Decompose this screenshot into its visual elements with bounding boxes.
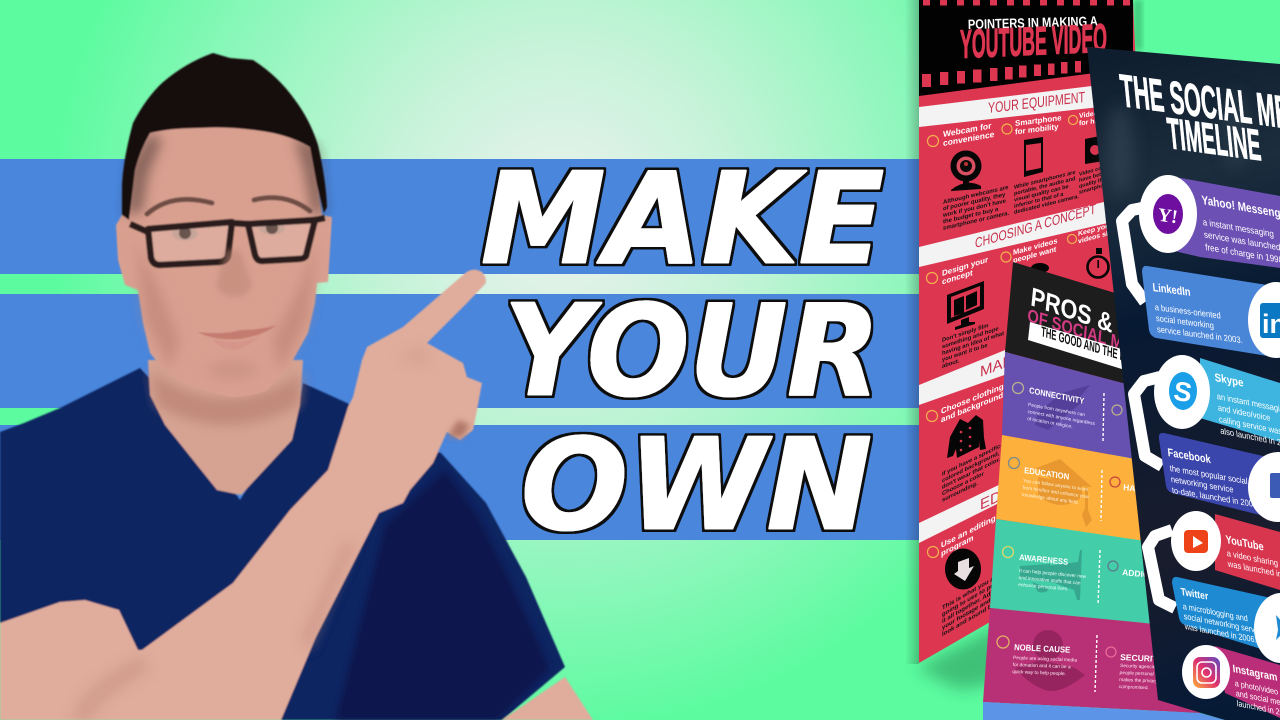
item: youtube: [1171, 511, 1280, 590]
film strip squares: [922, 0, 1130, 87]
row: awareness: enhance personal lives.: [1018, 582, 1069, 593]
item: twitter: Twitter: [1180, 586, 1209, 603]
face shading: [135, 240, 318, 379]
shirt shadow: [335, 470, 550, 720]
band: magenta: [983, 608, 1200, 713]
icon: camera: [1085, 134, 1110, 164]
row: noble cause: SECURITY: [1120, 652, 1164, 664]
nose: [216, 250, 252, 297]
item: design your concept: concept: [942, 268, 973, 286]
item: use an editing program: your footage and the: [942, 591, 1002, 632]
neck: [148, 360, 303, 495]
item: video camera: quality than: [1079, 175, 1110, 190]
item: design your concept: [926, 255, 1004, 370]
poster shadow: [905, 0, 1280, 720]
item: webcam: convenience: [943, 129, 995, 148]
item: keep videos short: Keep your: [1078, 221, 1112, 238]
section band: edit: [919, 482, 1014, 543]
poster dark header: [1005, 262, 1130, 385]
section band: make: [919, 348, 1022, 405]
item: yahoo messenger: [1139, 175, 1280, 268]
icon: bow: [1031, 263, 1049, 273]
item: use an editing program: program: [941, 532, 974, 558]
row: connectivity: CONNECTIVITY: [1029, 385, 1085, 406]
eyes: [172, 222, 285, 240]
band: blue footer: [983, 702, 1225, 720]
icon: smartphone: [1024, 137, 1043, 177]
title: make your own: YOUR: [504, 278, 880, 424]
row: education: knowledge about any field.: [1022, 492, 1079, 506]
icon: instagram: [1193, 657, 1220, 688]
row: connectivity: of location or religion.: [1027, 416, 1073, 430]
title: make your own: OWN: [521, 412, 872, 558]
item: choose clothing: If you have a specific-: [942, 442, 1002, 478]
band: orange: [996, 435, 1145, 541]
item: smartphone: While smartphones are: [1014, 170, 1075, 191]
item: keep videos short: [1068, 219, 1120, 278]
row: noble cause: makes the privacy: [1119, 677, 1159, 685]
item: video camera: for high quality: [1079, 113, 1130, 127]
panel: pros and cons of social media poster: [983, 262, 1225, 720]
icon: megaphone: [1020, 550, 1082, 600]
row: noble cause: quick way to help people.: [1012, 669, 1066, 677]
item: skype: [1154, 355, 1280, 451]
row: awareness: and innovative stuffs that can: [1018, 575, 1081, 587]
band: purple: [1002, 352, 1135, 459]
item: use an editing program: Use an editing: [941, 513, 996, 550]
item: smartphone: dedicated video camera.: [1014, 194, 1079, 216]
item: webcam: Although webcams are: [943, 185, 1009, 206]
row: education: You can follow anyone to learn: [1023, 478, 1089, 493]
item: choose clothing: colored background,: [942, 450, 1000, 484]
item: webcam: work if you don't have: [942, 198, 1007, 219]
item: instagram: Instagram: [1232, 663, 1278, 684]
item: smartphone: for mobility: [1015, 122, 1059, 136]
item: choose clothing: Choose clothing: [941, 381, 1004, 416]
row: awareness: It can help people discover new: [1019, 568, 1087, 580]
icon: download: [945, 548, 981, 590]
connector: skype to facebook: [1134, 377, 1162, 466]
item: skype: Skype: [1214, 371, 1244, 390]
item: choose clothing: surrounding.: [942, 480, 978, 504]
item: twitter: was launched in 2006.: [1183, 621, 1257, 645]
blue stripes: [0, 159, 920, 540]
poster title: [960, 14, 1107, 67]
icon: youtube play: [1184, 530, 1208, 553]
item: design your concept: Design your: [942, 255, 989, 278]
row: noble cause: Security agencies can: [1120, 663, 1167, 671]
item: smartphone: portable, the audio and: [1014, 176, 1076, 197]
item: design your concept: something and hope: [942, 326, 999, 350]
item: use an editing program: [928, 513, 1006, 638]
poster title: PROS & CONS: [1029, 282, 1182, 362]
poster title: THE GOOD AND THE BAD: [1041, 324, 1137, 368]
item: twitter: social networking service: [1183, 611, 1265, 637]
row: noble cause: compromised.: [1118, 684, 1149, 691]
item: choose clothing: and background: [941, 390, 1003, 424]
row: awareness: ADDICTION: [1122, 567, 1170, 582]
row: noble cause: for donation and it can be a: [1012, 662, 1071, 670]
item: keep videos short: videos short: [1078, 226, 1120, 245]
item: smartphone: [1002, 113, 1079, 216]
item: webcam: of poorer quality, they: [943, 192, 1006, 212]
icon: monitor: [947, 281, 984, 330]
row: education: from him/her and enhance your: [1022, 485, 1090, 500]
panel: YouTube video poster: [919, 0, 1150, 663]
item: smartphone: inferior to that of a: [1014, 191, 1064, 210]
face: [116, 100, 332, 397]
item: facebook: Facebook: [1167, 446, 1211, 467]
icon: twitter: [1276, 615, 1280, 640]
icon: skype: [1169, 372, 1197, 410]
title: make your own: [481, 146, 884, 558]
icon: globe and hands: [1015, 630, 1085, 691]
item: youtube: YouTube: [1225, 533, 1264, 554]
section band: make: MAKE: [980, 348, 1022, 381]
item: facebook: networking service: [1170, 475, 1234, 495]
item: make videos people want: people want: [1013, 244, 1057, 265]
icon: yahoo: Y!: [1156, 205, 1179, 228]
item: smartphone: visual quality can be: [1014, 184, 1069, 204]
neck shadow: [150, 370, 302, 425]
item: linkedin: service launched in 2003.: [1156, 325, 1243, 345]
item: choose clothing: [926, 381, 1004, 504]
item: design your concept: Don't simply film: [942, 323, 988, 344]
section band: your equipment: YOUR EQUIPMENT: [988, 89, 1085, 117]
icon: graduation cap: [1036, 459, 1092, 527]
row: noble cause: people personal data: [1119, 670, 1165, 678]
row: connectivity: connect with anyone regardless: [1027, 409, 1096, 427]
item: use an editing program: This is what you are: [942, 572, 1000, 612]
row: awareness: [1002, 546, 1170, 605]
row: education: [1008, 458, 1149, 527]
item: yahoo messenger: service was launched: [1203, 229, 1280, 253]
icon: stopwatch: [1088, 248, 1108, 278]
title: make your own: MAKE: [481, 146, 884, 292]
item: use an editing program: it all together. Adjust: [942, 584, 1002, 625]
thumb shadow: [448, 420, 470, 438]
item: skype: and video/voice: [1217, 402, 1271, 423]
item: use an editing program: look and sound better.: [942, 595, 1006, 638]
item: linkedin: a business-oriented: [1154, 303, 1222, 321]
icon: facebook: [1270, 473, 1280, 498]
row: education: HARM: [1123, 482, 1149, 495]
mouth: [197, 325, 277, 350]
icon: skype: S: [1172, 376, 1194, 408]
row: education: EDUCATION: [1024, 465, 1070, 482]
icon: jacket: [947, 415, 986, 458]
poster black header: [919, 0, 1133, 96]
item: webcam: [928, 120, 1009, 232]
item: linkedin: social networking: [1155, 314, 1215, 331]
item: video camera: smartphones: [1079, 180, 1113, 196]
item: webcam: the budget to buy a: [943, 207, 999, 225]
icon: yahoo: [1153, 194, 1183, 234]
panel: social media timeline poster: [1087, 47, 1280, 720]
section band: edit: EDIT: [980, 482, 1014, 514]
section band: your equipment: [919, 85, 1100, 127]
item: yahoo messenger: a instant messaging: [1202, 216, 1274, 239]
row: noble cause: NOBLE CAUSE: [1014, 642, 1071, 655]
item: facebook: [1159, 433, 1280, 522]
item: facebook: to-date, launched in 2004.: [1171, 486, 1260, 510]
item: make videos people want: Make videos: [1013, 236, 1058, 257]
poster light reflections: [1106, 90, 1247, 195]
item: video camera: Video cameras: [1079, 161, 1117, 178]
row: noble cause: People are using social media: [1013, 655, 1077, 664]
item: design your concept: having an idea of what: [942, 331, 1004, 357]
connector: yahoo to linkedin: [1122, 207, 1147, 302]
poster title: OF SOCIAL MEDIA: [1027, 304, 1158, 364]
row: connectivity: [1012, 382, 1122, 441]
row: noble cause: [997, 630, 1167, 692]
item: webcam: Webcam for: [943, 120, 992, 139]
icon: webcam: [950, 150, 982, 191]
row: connectivity: People from anywhere can: [1028, 402, 1085, 418]
item: webcam: smartphone or camera.: [943, 211, 1009, 232]
item: video camera: Video camera: [1079, 107, 1124, 120]
item: linkedin: [1142, 266, 1280, 358]
hair fade at the sides: [126, 132, 325, 215]
band: teal: [990, 519, 1155, 624]
item: design your concept: you want it to be: [942, 343, 988, 363]
arm shading: [72, 345, 430, 720]
item: video camera: [1068, 106, 1130, 196]
person pointing: [0, 53, 593, 720]
right arm sliver: [502, 677, 593, 720]
arm and hand: [0, 270, 486, 720]
section band: choosing a concept: CHOOSING A CONCEPT: [975, 201, 1096, 252]
item: video camera: have better: [1079, 170, 1109, 184]
glasses: [130, 218, 325, 265]
poster dark background: [1087, 47, 1280, 720]
item: facebook: the most popular social: [1169, 464, 1248, 486]
section band: choosing a concept: [919, 200, 1112, 267]
item: twitter: [1172, 577, 1280, 663]
poster red base: [919, 0, 1150, 663]
shirt: [0, 368, 565, 720]
connector: youtube to twitter: [1148, 530, 1175, 608]
poster title: POINTERS IN MAKING A: [968, 14, 1098, 32]
item: design your concept: about.: [942, 358, 960, 370]
item: use an editing program: going to use to put: [942, 580, 997, 618]
item: smartphone: Smartphone: [1015, 113, 1062, 128]
row: awareness: AWARENESS: [1019, 552, 1069, 567]
item: twitter: a microblogging and: [1182, 601, 1248, 624]
hair: [122, 53, 327, 220]
item: instagram: [1182, 645, 1280, 720]
item: choose clothing: don't wear that color.: [942, 456, 1000, 491]
item: linkedin: LinkedIn: [1152, 282, 1191, 299]
item: choose clothing: Choose a color: [942, 470, 984, 497]
item: make videos people want: [1001, 236, 1058, 273]
eyebrows: [147, 198, 310, 214]
